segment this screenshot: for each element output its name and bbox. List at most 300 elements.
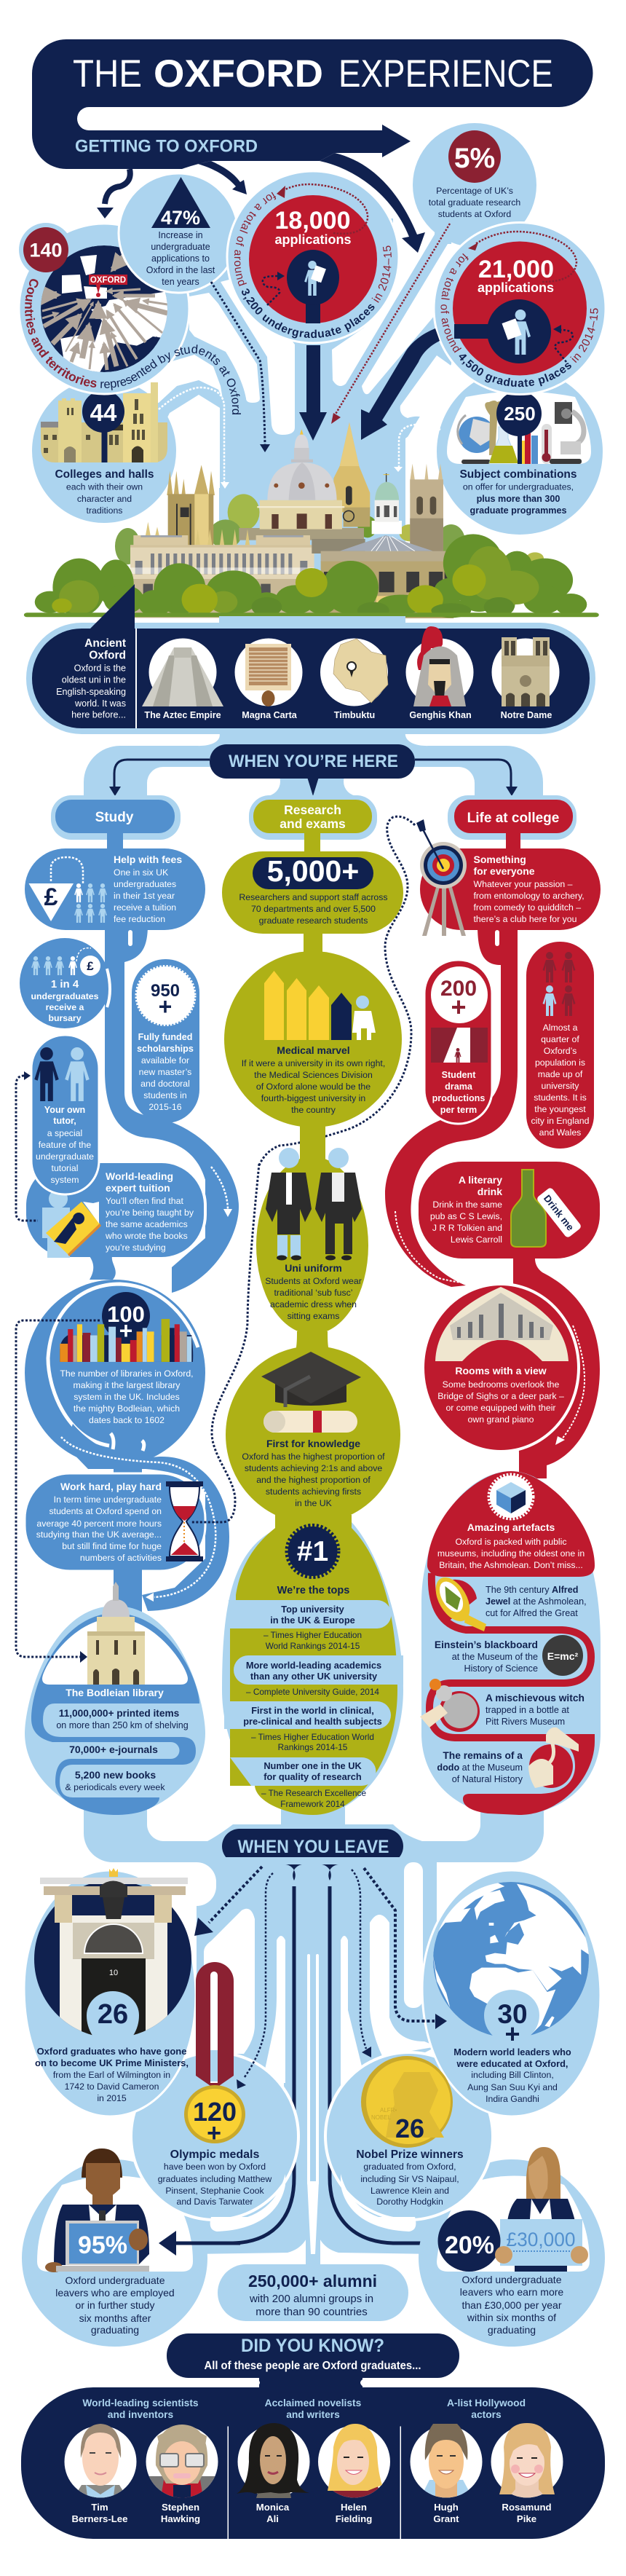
spire of St Mary's [333, 422, 370, 527]
category labels: World-leading scientists [82, 2398, 199, 2408]
bubble: 100+ libraries: system in the UK. Includes [74, 1392, 180, 1402]
pill: something for everyone: from comedy to quidditch – [473, 902, 581, 913]
header: title banner: OXFORD [154, 52, 323, 95]
panel: we're the tops: We’re the tops [277, 1585, 349, 1596]
pill: a quarter of population: made up of [538, 1069, 583, 1079]
bubble: rooms with a view: Some bedrooms overlook the [443, 1379, 559, 1390]
arrow: to 5 percent and beyond [320, 153, 425, 253]
icon: microscope [550, 402, 584, 464]
category labels: actors [471, 2409, 502, 2420]
Sheldonian [312, 473, 453, 618]
text: Ancient Oxford: English-speaking [56, 687, 126, 697]
bubble: colleges and halls: each with their own [66, 482, 143, 492]
bubble: 5 percent graduate research students: students at Oxford [438, 209, 511, 219]
category labels: Acclaimed novelists [265, 2398, 362, 2408]
pill: help with fees: Help with fees [114, 854, 182, 865]
arrow: to 95 percent [159, 2231, 176, 2256]
pill: world-leading expert tuition: you’re being taught by [106, 1208, 194, 1218]
connector and heading: when you're here: WHEN YOU’RE HERE [229, 752, 398, 771]
pill: something for everyone: Something [473, 854, 526, 865]
icon: globe [458, 415, 495, 464]
header: title banner [32, 39, 593, 169]
bubble: uni uniform: Students at Oxford wear [265, 1276, 362, 1286]
bubble: rooms with a view: or come equipped with their [445, 1403, 556, 1413]
text: Ancient Oxford: Ancient [84, 637, 126, 650]
heading and connector: when you leave: WHEN YOU LEAVE [237, 1837, 389, 1857]
portrait: Helen Fielding: Helen [341, 2502, 367, 2513]
item: Genghis Khan [406, 626, 473, 720]
pill: a literary drink: J R R Tolkien and [432, 1223, 502, 1233]
bubble: 20 percent earn more: graduating [488, 2324, 536, 2336]
content: Nobel Prize winners: Dorothy Hodgkin [376, 2197, 443, 2207]
bubble: 100+ libraries: making it the largest library [74, 1380, 181, 1390]
pill: your own tutor: undergraduate [36, 1151, 94, 1162]
item: witch in a bottle: Pitt Rivers Museum [486, 1717, 565, 1727]
bubble: 20 percent earn more: Oxford undergraduate [462, 2274, 562, 2285]
bubble: rooms with a view: own grand piano [468, 1414, 534, 1425]
bubble: 20 percent earn more: leavers who earn more [460, 2286, 563, 2298]
icon: bone [485, 401, 501, 455]
bubble: rooms with a view: Rooms with a view [455, 1365, 547, 1376]
item: dodo remains: dodo at the Museum [437, 1762, 523, 1773]
bubble: first for knowledge [226, 1346, 400, 1524]
pill: help with fees [25, 848, 205, 946]
portrait: Monica Ali: Ali [266, 2513, 279, 2524]
pill: your own tutor: Your own [44, 1105, 85, 1115]
pill: help with fees: £ [44, 883, 58, 911]
map of arrows to Oxford [41, 245, 168, 375]
pill: world-leading expert tuition: expert tuition [106, 1182, 170, 1194]
pill: your own tutor: feature of the [39, 1140, 91, 1150]
text: Ancient Oxford: world. It was [74, 698, 126, 709]
portrait: Hugh Grant: Hugh [434, 2502, 459, 2513]
background: Olympic medals bubble [131, 2052, 298, 2232]
arrow: to countries [97, 169, 130, 218]
column: Life at college [385, 795, 601, 1816]
icon: bottle with tag: Drink me [542, 1193, 577, 1233]
dotted and dashed route lines [159, 224, 450, 489]
stat: 5,000+ researchers: Researchers and support staff across [239, 892, 388, 902]
icon: Nobel coin: ALFR• [380, 2107, 397, 2114]
portrait: Stephen Hawking: Stephen [162, 2502, 199, 2513]
pill: world-leading expert tuition [25, 1162, 232, 1259]
pill: something for everyone: there’s a club here for you [473, 914, 577, 924]
item: Einstein's blackboard: at the Museum of the [452, 1652, 538, 1662]
pill: scholarships: students in [143, 1090, 187, 1100]
item: dodo remains [437, 1728, 579, 1788]
bubble: 47 percent increase: 47% [161, 207, 200, 229]
bubble: 95 percent employed: Oxford undergraduate [66, 2274, 165, 2286]
item: Einstein's blackboard: History of Science [464, 1663, 538, 1674]
item: Magna Carta [234, 638, 303, 720]
label: Oxford pin [89, 275, 127, 297]
pill: your own tutor: tutor, [53, 1116, 76, 1126]
bubble: first for knowledge: and the highest proportion of [256, 1475, 371, 1485]
bubble: Prime Ministers: 10 [109, 1969, 118, 1977]
neck [90, 1256, 116, 1280]
portrait: Hugh Grant [411, 2424, 482, 2524]
bubble: 18,000 undergraduate applications: applications [274, 232, 352, 247]
panel: we're the tops: – Complete University Guide, 2014 [246, 1687, 379, 1697]
bubble: the Bodleian library [25, 1569, 205, 1816]
bubble: 100+ libraries: + [119, 1317, 132, 1344]
bubble: 21,000 graduate applications: for a total of around 4,500 graduate places in 2014–15 [440, 253, 598, 387]
badge: 140 [23, 227, 68, 272]
portrait: Tim Berners-Lee [64, 2424, 137, 2524]
portrait: Helen Fielding: Fielding [336, 2513, 372, 2524]
portrait: Helen Fielding [318, 2424, 390, 2524]
pill: help with fees: fee reduction [114, 914, 165, 924]
stat: 5,000+ researchers: 70 departments and over 5,500 [251, 904, 376, 914]
pill: 200+ drama productions: Student [442, 1070, 476, 1080]
bubble: medical marvel [224, 951, 402, 1127]
illustration: Oxford skyline [24, 422, 599, 619]
content: Olympic medals: Olympic medals [170, 2148, 259, 2161]
bubble: 100+ libraries: 100 [107, 1301, 145, 1327]
pill: scholarships: 2015-16 [148, 1102, 182, 1112]
icon: bottle with tag [511, 1170, 582, 1247]
pill: work hard, play hard: average 40 percent more hours [36, 1519, 162, 1529]
pill: your own tutor: tutorial [52, 1163, 78, 1173]
panel: amazing artefacts [420, 1471, 601, 1816]
pill: 200+ drama productions: per term [440, 1105, 477, 1115]
icon: thermometer [542, 424, 552, 464]
badge: number 1 [288, 1527, 338, 1576]
stat: 5,000+ researchers: 5,000+ [267, 854, 359, 888]
icon: Nobel coin: NOBEL [371, 2114, 392, 2121]
pill: a quarter of population [526, 942, 594, 1149]
content: Nobel Prize winners [356, 2056, 464, 2207]
bubble: 18,000 undergraduate applications: for a total of around 3,200 undergraduate places in 2014–15 [234, 192, 392, 338]
buildings [130, 422, 453, 618]
tab: Research and exams [249, 795, 377, 856]
bubble: 47 percent increase: ten years [162, 277, 199, 287]
bubble: Prime Ministers: from the Earl of Wilmington in [53, 2070, 170, 2080]
panel: amazing artefacts: Britain, the Ashmolean. Don’t miss... [439, 1560, 583, 1570]
pill: scholarships: scholarships [137, 1044, 194, 1054]
section: getting to Oxford [19, 123, 604, 571]
column: Study [16, 795, 239, 1816]
icon: cube badge [490, 1476, 532, 1518]
pill: 250,000+ alumni: 250,000+ alumni [248, 2272, 377, 2291]
item: Notre Dame [492, 637, 559, 720]
category labels: and inventors [108, 2409, 174, 2420]
connector and heading: when you're here [84, 732, 543, 805]
tab: Research and exams: and exams [280, 816, 346, 831]
bubble: uni uniform: traditional ‘sub fusc’ [274, 1288, 352, 1298]
pill: 200+ drama productions [424, 960, 492, 1124]
panel: did you know: DID YOU KNOW? [241, 2336, 384, 2356]
icon: flask [489, 427, 518, 463]
item: Genghis Khan: Genghis Khan [409, 710, 472, 720]
pill: a quarter of population: university [542, 1081, 579, 1091]
icon: crown and lamp [100, 1868, 127, 1919]
bubble: bursary: 1 in 4 [51, 978, 79, 990]
panel: amazing artefacts: Amazing artefacts [467, 1521, 555, 1533]
bubble: Prime Ministers: on to become UK Prime Ministers, [35, 2057, 189, 2068]
pill: something for everyone: from entomology to archery, [473, 891, 585, 901]
trees and lawn [24, 534, 599, 619]
pill: world-leading expert tuition: who wrote the books [105, 1231, 188, 1241]
bubble: subject combinations [437, 369, 603, 535]
icon: Radcliffe Camera [87, 1582, 145, 1685]
pill: your own tutor: a special [47, 1128, 82, 1138]
pill: work hard, play hard: students at Oxford spend on [49, 1506, 162, 1516]
pill: scholarships: + [159, 993, 172, 1020]
bubble: modern world leaders [422, 1870, 601, 2116]
bubble: 20 percent earn more [419, 2147, 605, 2347]
bubble: bursary: undergraduates [31, 991, 99, 1001]
panel: amazing artefacts: Oxford is packed with public [455, 1537, 567, 1547]
pill: scholarships [132, 959, 199, 1123]
bubble: medical marvel: the Medical Sciences Division [254, 1070, 373, 1080]
bubble: uni uniform: academic dress when [270, 1299, 357, 1309]
pill: work hard, play hard: Work hard, play hard [60, 1481, 162, 1492]
item: witch in a bottle: A mischievous witch [486, 1693, 585, 1703]
bubble: 47 percent increase: undergraduate [151, 242, 210, 252]
pill: a quarter of population: population is [535, 1057, 585, 1068]
tab: Research and exams: Research [284, 803, 341, 817]
portrait: Tim Berners-Lee: Berners-Lee [72, 2513, 127, 2524]
bubble: uni uniform: Uni uniform [285, 1262, 342, 1274]
bubble: the Bodleian library: 11,000,000+ printed items [59, 1708, 180, 1719]
bubble: bursary [20, 938, 110, 1028]
dotted routes from when you leave [194, 1867, 447, 2077]
bubble: 47 percent increase: Increase in [158, 230, 203, 240]
panel: Ancient Oxford [26, 584, 595, 734]
item: The Aztec Empire: The Aztec Empire [144, 710, 221, 720]
figure: graduate with £30,000 card: £30,000 [507, 2229, 575, 2250]
bubble: Prime Ministers [24, 1868, 196, 2116]
panel: we're the tops: – The Research Excellence [261, 1788, 366, 1798]
pill: 200+ drama productions: + [451, 992, 467, 1022]
panel: we're the tops: World Rankings 2014-15 [266, 1641, 360, 1651]
portrait: Monica Ali: Monica [256, 2502, 290, 2513]
portrait: Stephen Hawking: Hawking [161, 2513, 200, 2524]
pill: 250,000+ alumni: with 200 alumni groups in [249, 2293, 373, 2305]
bubble: Prime Ministers: Oxford graduates who have gone [37, 2046, 186, 2057]
icon: bar pencils and doctor [264, 971, 376, 1040]
bubble: colleges and halls: traditions [87, 505, 122, 516]
panel: amazing artefacts: museums, including the oldest one in [437, 1548, 585, 1559]
icon: books and chart [521, 430, 538, 464]
bubble: modern world leaders: including Bill Clinton, [471, 2070, 554, 2080]
bubble: 100+ libraries: The number of libraries in Oxford, [60, 1368, 194, 1379]
bubble: 21,000 graduate applications: 21,000 [478, 256, 554, 283]
bubble: 100+ libraries: dates back to 1602 [89, 1415, 165, 1425]
pill: world-leading expert tuition: the same academics [106, 1219, 188, 1229]
content: Nobel Prize winners: Lawrence Klein and [371, 2186, 449, 2196]
column: Research and exams [191, 795, 415, 1816]
pill: scholarships: 950 [151, 981, 180, 1001]
bubble: 20 percent earn more: than £30,000 per year [461, 2299, 562, 2311]
icon: medal: 120 [193, 2097, 237, 2127]
bubble: medical marvel: the country [291, 1105, 336, 1115]
pill: scholarships: Fully funded [138, 1032, 192, 1042]
trunk and ring [105, 925, 239, 1293]
portrait: Tim Berners-Lee: Tim [91, 2502, 108, 2513]
bubble: 95 percent employed: six months after [79, 2312, 151, 2324]
header: title banner: GETTING TO OXFORD [75, 137, 258, 156]
figure: graduate with £30,000 card [438, 2147, 588, 2272]
content: Nobel Prize winners: including Sir VS Naipaul, [360, 2174, 459, 2184]
pill: help with fees: One in six UK [114, 867, 169, 878]
bubble: modern world leaders: Aung San Suu Kyi and [467, 2082, 558, 2092]
tab: Life at college: Life at college [467, 811, 559, 826]
icon: medal: + [207, 2119, 221, 2147]
pill: your own tutor: system [51, 1175, 79, 1185]
curved caption: countries and territories: Countries and territories represented by students at Oxford [25, 279, 241, 414]
heading and connector: when you leave [84, 1806, 544, 1864]
figure: graduate at laptop: 95% [78, 2232, 127, 2259]
arrow: graduate stem [361, 328, 440, 440]
badge: number 1: #1 [297, 1536, 328, 1567]
bubble: uni uniform [256, 1148, 368, 1334]
pill: help with fees: in their 1st year [114, 891, 175, 901]
portrait: Hugh Grant: Grant [433, 2513, 459, 2524]
bubble: 21,000 graduate applications: applications [478, 280, 554, 295]
bubble: 47 percent increase: Oxford in the last [146, 265, 215, 275]
panel: we're the tops: than any other UK university [250, 1671, 378, 1682]
bubble: subject combinations: on offer for undergraduates, [463, 482, 574, 492]
bubble: first for knowledge: in the UK [295, 1498, 333, 1508]
bubble: 47 percent increase: applications to [151, 253, 210, 264]
item: Timbuktu [320, 638, 388, 720]
item: The Aztec Empire [142, 638, 223, 720]
panel: we're the tops: pre-clinical and health subjects [243, 1716, 382, 1727]
badge: 140: 140 [29, 239, 63, 261]
icon: medal [184, 1962, 245, 2147]
pill: something for everyone [416, 819, 601, 946]
item: witch in a bottle: trapped in a bottle at [486, 1705, 569, 1715]
bubble: countries and territories [19, 223, 189, 394]
bubble: modern world leaders: were educated at Oxford, [456, 2058, 568, 2069]
portrait: Rosamund Pike: Pike [517, 2513, 536, 2524]
bubble: 95 percent employed: graduating [91, 2324, 139, 2336]
label: Oxford pin: OXFORD [90, 276, 126, 285]
item: witch in a bottle [420, 1679, 585, 1732]
pill: a quarter of population: students. It is [534, 1092, 587, 1103]
bubble: bursary: £ [87, 959, 94, 973]
pill: a literary drink: Drink in the same [432, 1200, 502, 1210]
panel: we're the tops: First in the world in clinical, [251, 1705, 374, 1716]
pill: work hard, play hard: numbers of activities [80, 1553, 162, 1563]
bubble: modern world leaders: + [504, 2019, 520, 2049]
text: Ancient Oxford: here before... [71, 709, 126, 720]
text: Ancient Oxford: Oxford is the [74, 663, 126, 673]
pill: a literary drink: Lewis Carroll [451, 1234, 502, 1245]
bubble: bursary: receive a [46, 1002, 84, 1012]
pill: scholarships: new master’s [139, 1067, 191, 1077]
trunk and ring [385, 925, 518, 1287]
icon: Bridge of Sighs [435, 1287, 568, 1361]
content: Olympic medals: have been won by Oxford [164, 2162, 266, 2172]
panel: did you know: All of these people are Oxford graduates... [204, 2360, 421, 2372]
item: Einstein's blackboard [435, 1635, 583, 1676]
bubble: medical marvel: If it were a university in its own right, [242, 1058, 385, 1068]
bubble: uni uniform: sitting exams [288, 1311, 339, 1321]
bubble: the Bodleian library: 5,200 new books [75, 1769, 156, 1781]
back trees [115, 494, 544, 564]
arrow: undergraduate stem [299, 345, 327, 441]
pill: world-leading expert tuition: World-leading [106, 1170, 173, 1182]
panel: we're the tops [222, 1515, 403, 1816]
portrait: Rosamund Pike [491, 2423, 563, 2524]
bubble: 47 percent increase [119, 173, 238, 293]
item: Einstein's blackboard: E=mc² [547, 1650, 579, 1662]
panel: we're the tops: Framework 2014 [280, 1799, 345, 1809]
pill: world-leading expert tuition: you’re studying [106, 1242, 166, 1253]
pill: 250,000+ alumni [218, 2264, 408, 2321]
bubble: the Bodleian library: The Bodleian library [66, 1687, 164, 1698]
pill: a literary drink: pub as C S Lewis, [430, 1211, 502, 1221]
panel: we're the tops: in the UK & Europe [270, 1615, 355, 1626]
bubble: 95 percent employed [22, 2148, 207, 2347]
stat: 5,000+ researchers: graduate research students [259, 915, 368, 926]
pill: help with fees: receive a tuition [114, 902, 176, 913]
bubble: 5 percent graduate research students: total graduate research [429, 197, 520, 208]
pill: a quarter of population: the youngest [534, 1104, 586, 1114]
pill: work hard, play hard: but still find time for huge [62, 1541, 162, 1551]
item: Alfred Jewel: The 9th century Alfred [486, 1585, 578, 1595]
content: Olympic medals: and Davis Tarwater [176, 2197, 253, 2207]
pill: a quarter of population: quarter of [541, 1034, 579, 1044]
pill: help with fees: undergraduates [114, 879, 176, 889]
panel: we're the tops: – Times Higher Education [264, 1630, 362, 1640]
pill: a literary drink: A literary [459, 1174, 502, 1186]
icon: Nobel coin [361, 2056, 453, 2148]
content: Nobel Prize winners: Nobel Prize winners [356, 2148, 464, 2161]
pill: world-leading expert tuition: You’ll often find that [106, 1196, 183, 1206]
panel: we're the tops: Rankings 2014-15 [278, 1742, 348, 1752]
item: Alfred Jewel: Jewel at the Ashmolean, [486, 1596, 587, 1607]
category labels: and writers [286, 2409, 340, 2420]
dotted routes, left margin [16, 1071, 100, 1663]
bubble: subject combinations: Subject combinations [459, 468, 577, 481]
portrait: Rosamund Pike: Rosamund [502, 2502, 552, 2513]
text: Ancient Oxford: oldest uni in the [62, 674, 126, 685]
bubble: 95 percent employed: leavers who are employed [55, 2287, 175, 2299]
pill: scholarships: available for [141, 1055, 189, 1066]
arrow: to 18,000 [198, 161, 247, 194]
bubble: the Bodleian library: & periodicals every week [65, 1782, 165, 1792]
tower at right [410, 464, 443, 552]
bubble: modern world leaders: Indira Gandhi [486, 2094, 539, 2104]
figure: graduate with £30,000 card: 20% [445, 2232, 494, 2259]
panel: did you know [21, 2333, 605, 2539]
ring and neck: literary to rooms [513, 1259, 600, 1478]
pill: scholarships: and doctoral [140, 1079, 190, 1089]
content: Olympic medals: graduates including Matthew [158, 2174, 272, 2184]
background: Nobel Prize bubble [325, 2052, 493, 2232]
panel: we're the tops: for quality of research [264, 1771, 362, 1782]
content: Nobel Prize winners: 26 [395, 2114, 424, 2143]
pill: work hard, play hard [25, 1437, 215, 1602]
pill: 200+ drama productions: productions [432, 1093, 485, 1103]
bubble: rooms with a view [423, 1284, 585, 1452]
pill: 250,000+ alumni: more than 90 countries [255, 2306, 368, 2318]
pill: something for everyone: for everyone [473, 865, 535, 877]
bubble: colleges and halls [32, 379, 176, 523]
bubble: 18,000 undergraduate applications: 18,000 [275, 207, 351, 235]
item: dodo remains: of Natural History [452, 1774, 523, 1784]
pill: a quarter of population: city in England [531, 1116, 590, 1126]
Radcliffe Camera dome [239, 429, 364, 540]
bubble: the Bodleian library: on more than 250 km of shelving [56, 1720, 189, 1730]
bubble: first for knowledge: Oxford has the highest proportion of [242, 1452, 385, 1462]
portrait: Monica Ali [237, 2423, 310, 2524]
panel: we're the tops: – Times Higher Education World [251, 1732, 374, 1742]
